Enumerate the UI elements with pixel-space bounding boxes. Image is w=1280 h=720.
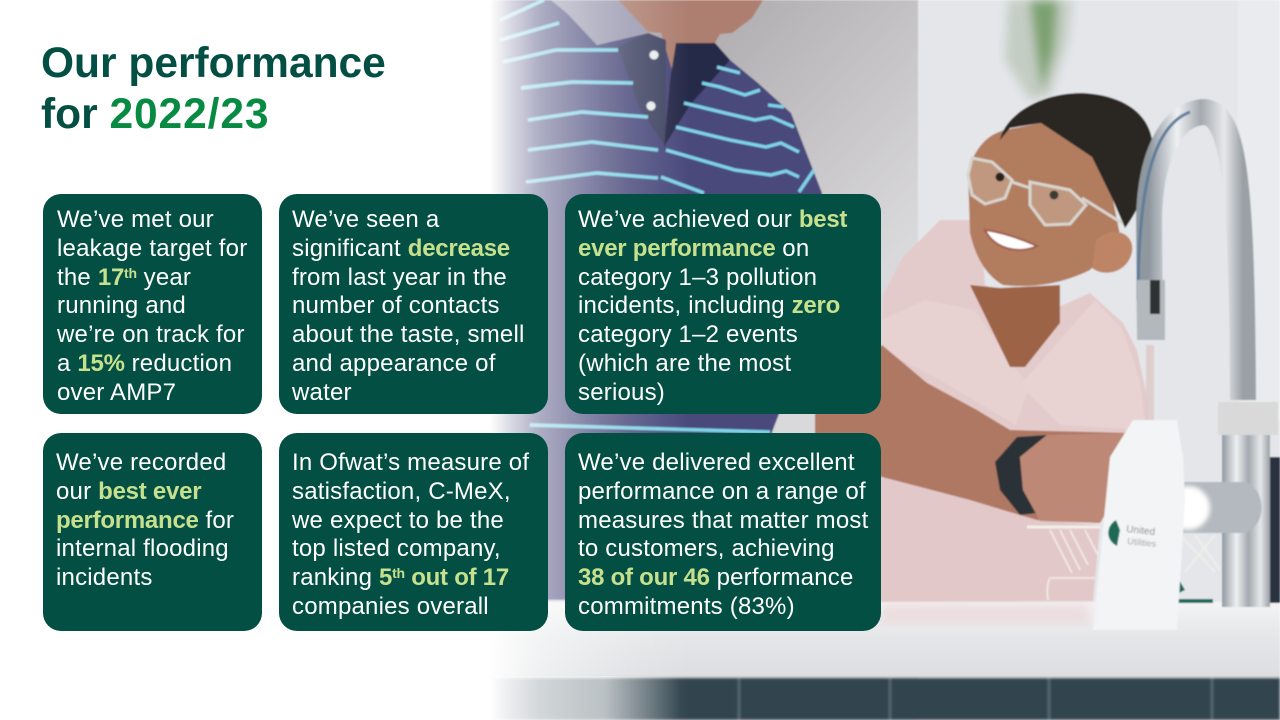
card: internal flooding: our best ever xyxy=(56,478,201,505)
man's shirt xyxy=(480,0,822,600)
hair xyxy=(1000,93,1153,228)
man's neck xyxy=(618,0,763,70)
card: C-MeX xyxy=(279,433,548,631)
card: C-MeX: top listed company, xyxy=(292,535,501,562)
card: C-MeX: satisfaction, C-MeX, xyxy=(292,478,511,505)
card: water quality contacts xyxy=(279,194,548,414)
card: pollution: ever performance on xyxy=(578,235,809,262)
glasses xyxy=(968,158,1122,225)
title: Our performance xyxy=(41,40,386,87)
white fade over cabinet xyxy=(490,676,680,720)
card: pollution xyxy=(565,194,881,414)
card: performance commitments: commitments (83%) xyxy=(578,593,795,620)
smile xyxy=(985,230,1037,250)
card: leakage: a 15% reduction xyxy=(57,350,232,377)
card: leakage: we’re on track for xyxy=(57,321,245,348)
water bottle: Utilities xyxy=(1127,536,1157,549)
card: water quality contacts: water xyxy=(292,379,352,406)
dish rack xyxy=(1027,527,1220,600)
white fade over photo xyxy=(0,0,700,720)
card: performance commitments xyxy=(565,433,881,631)
card: pollution: We’ve achieved our best xyxy=(578,206,847,233)
card: water quality contacts: about the taste, smell xyxy=(292,321,525,348)
boy's head xyxy=(968,93,1153,286)
card: performance commitments: measures that matter most xyxy=(578,507,868,534)
card: internal flooding xyxy=(43,433,262,631)
title xyxy=(41,40,386,138)
card: leakage: running and xyxy=(57,292,186,319)
card: C-MeX: ranking 5th out of 17 xyxy=(292,564,509,591)
boy's hoodie xyxy=(881,220,1147,602)
card: leakage xyxy=(43,194,262,414)
watch strap xyxy=(995,435,1047,515)
card: internal flooding: performance for xyxy=(56,507,234,534)
man's arm xyxy=(815,345,1130,523)
card: leakage: over AMP7 xyxy=(57,379,176,406)
card: water quality contacts: We’ve seen a xyxy=(292,206,439,233)
boy's neck xyxy=(970,285,1060,367)
wall xyxy=(480,0,1280,720)
man's collar xyxy=(551,0,648,45)
card: C-MeX: we expect to be the xyxy=(292,507,504,534)
card: water quality contacts: number of contacts xyxy=(292,292,500,319)
card: pollution: category 1–3 pollution xyxy=(578,264,817,291)
card: internal flooding: We’ve recorded xyxy=(56,449,226,476)
card: performance commitments: to customers, achieving xyxy=(578,535,835,562)
card: performance commitments: We’ve delivered excellent xyxy=(578,449,855,476)
card: leakage: We’ve met our xyxy=(57,206,214,233)
water bottle xyxy=(1093,420,1185,630)
card: pollution: serious) xyxy=(578,379,665,406)
card: water quality contacts: from last year in the xyxy=(292,264,507,291)
card: leakage: leakage target for xyxy=(57,235,247,262)
card: pollution: (which are the most xyxy=(578,350,791,377)
card: performance commitments: performance on a range of xyxy=(578,478,866,505)
boy's hand xyxy=(1020,433,1130,523)
card: C-MeX: companies overall xyxy=(292,593,489,620)
green cap xyxy=(1175,573,1213,603)
title: for 2022/23 xyxy=(41,91,269,138)
countertop xyxy=(480,602,1280,677)
plant xyxy=(1005,0,1072,100)
card: performance commitments: 38 of our 46 performance xyxy=(578,564,854,591)
ear xyxy=(1092,232,1132,273)
card: pollution: incidents, including zero xyxy=(578,292,840,319)
card: C-MeX: In Ofwat’s measure of xyxy=(292,449,529,476)
card: water quality contacts: significant decrease xyxy=(292,235,510,262)
mixer tap xyxy=(1137,112,1280,607)
card: pollution: category 1–2 events xyxy=(578,321,798,348)
shirt stripes xyxy=(500,0,814,432)
card: leakage: the 17th year xyxy=(57,264,191,291)
counter reflection xyxy=(880,603,1090,625)
bottle logo: United xyxy=(1126,524,1156,538)
card: internal flooding: incidents xyxy=(56,564,153,591)
water stream xyxy=(1146,345,1154,420)
cabinet xyxy=(480,678,1280,720)
card: water quality contacts: and appearance of xyxy=(292,350,496,377)
card: internal flooding: internal flooding xyxy=(56,535,229,562)
